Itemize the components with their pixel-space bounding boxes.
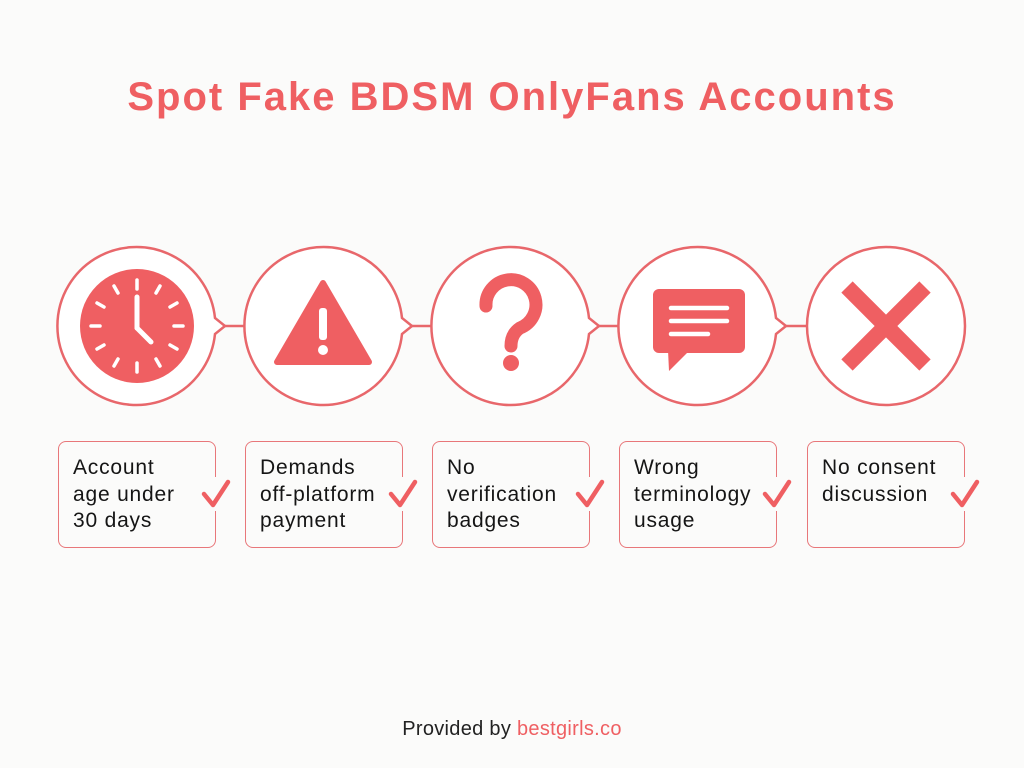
box: verification bbox=[432, 441, 590, 548]
circle: chat bbox=[618, 247, 786, 405]
box: account age bbox=[58, 441, 216, 548]
box: verification: No bbox=[447, 456, 475, 479]
circle: cross bbox=[807, 247, 965, 405]
box: consent bbox=[807, 441, 965, 548]
icon row bbox=[56, 246, 966, 406]
box: account age: age under bbox=[73, 482, 175, 506]
circle: clock bbox=[57, 247, 225, 405]
title: Spot Fake BDSM OnlyFans Accounts bbox=[127, 75, 897, 119]
circle: warning bbox=[244, 247, 412, 405]
box: off-platform: off-platform bbox=[260, 482, 375, 506]
box: off-platform: Demands bbox=[260, 456, 355, 479]
box: consent: No consent bbox=[822, 456, 936, 479]
box: account age: Account bbox=[73, 456, 154, 479]
box: off-platform: payment bbox=[260, 509, 346, 532]
box: off-platform bbox=[245, 441, 403, 548]
box: consent: discussion bbox=[822, 482, 928, 506]
connectors bbox=[225, 325, 806, 327]
circle: question bbox=[431, 247, 599, 405]
box: account age: 30 days bbox=[73, 509, 152, 532]
box: terminology: usage bbox=[634, 509, 695, 532]
box: verification: badges bbox=[447, 509, 521, 532]
box: verification: verification bbox=[447, 482, 557, 506]
box: terminology bbox=[619, 441, 777, 548]
footer: Provided by bestgirls.co bbox=[402, 718, 622, 740]
box: terminology: Wrong bbox=[634, 456, 699, 479]
box: terminology: terminology bbox=[634, 482, 751, 506]
